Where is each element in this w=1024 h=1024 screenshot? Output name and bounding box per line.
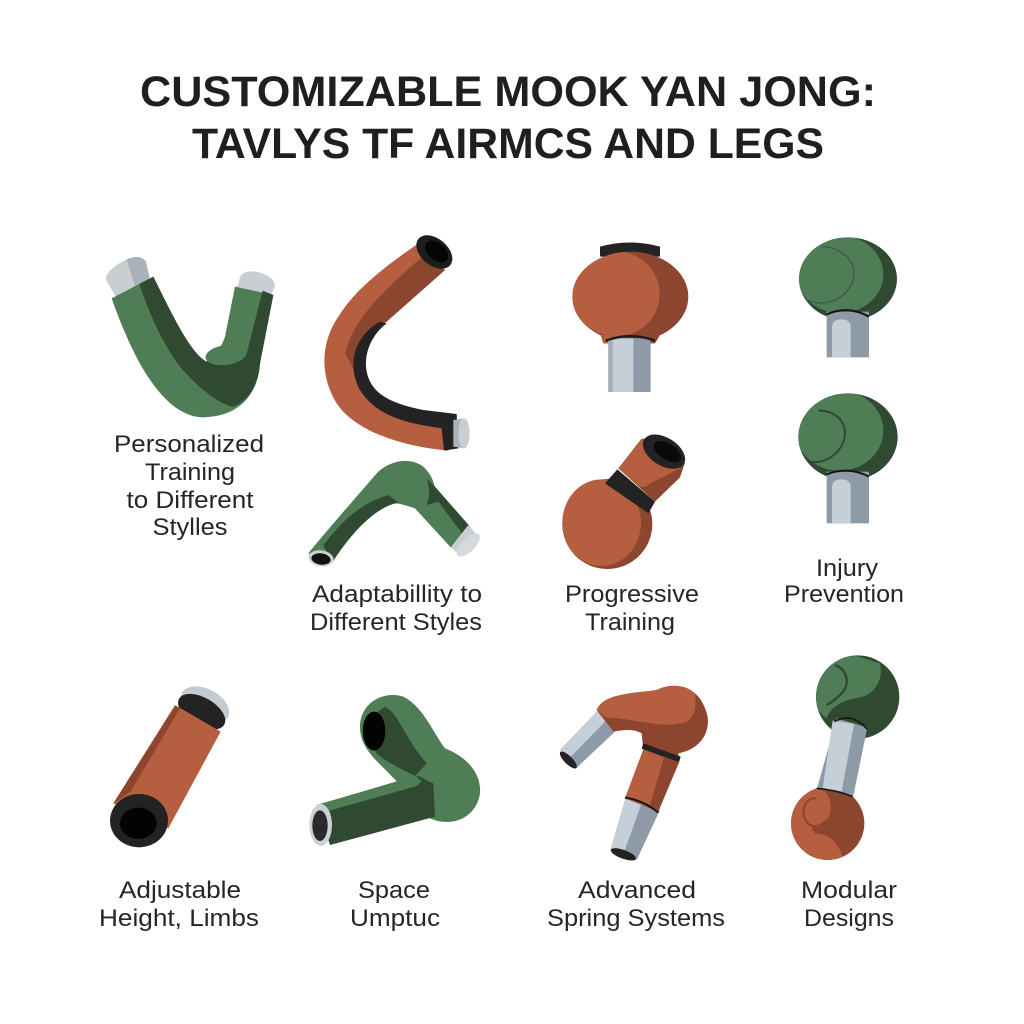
label: modular designs: Designs [804,905,894,932]
label: personalized training [114,431,264,541]
label: adaptability: Different Styles [310,609,482,636]
label: adjustable height [99,877,259,932]
title [140,68,876,168]
label: modular designs [801,877,897,932]
label: progressive training [565,581,699,636]
icon: terracotta ball with metal post [572,242,688,392]
label: adjustable height: Adjustable [119,877,241,904]
label: modular designs: Modular [801,877,897,904]
icon: green elbow arm [307,461,484,568]
label: space [350,877,440,932]
label: personalized training: Personalized [114,431,264,458]
label: adjustable height: Height, Limbs [99,905,259,932]
label: injury prevention: Injury [816,555,878,582]
icon: green ball with post, lower [795,391,898,523]
label: injury prevention [784,555,904,608]
label: progressive training: Training [585,609,675,636]
label: space: Umptuc [350,905,440,932]
label: progressive training: Progressive [565,581,699,608]
title: TAVLYS TF AIRMCS AND LEGS [192,120,824,168]
label: space: Space [358,877,430,904]
label: adaptability: Adaptabillity to [312,581,482,608]
icon: terracotta ball with angled sleeve [562,427,691,569]
icon: terracotta tube [110,679,235,847]
icon: terracotta hook with metal ends [557,686,708,863]
label: personalized training: Training [145,459,235,486]
label: advanced spring systems: Advanced [578,877,696,904]
title: CUSTOMIZABLE MOOK YAN JONG: [140,68,876,116]
label: personalized training: to Different [126,487,254,514]
icon: green V-shaped arm [106,257,275,417]
icon: terracotta curved arm [324,229,470,451]
label: personalized training: Stylles [152,514,228,541]
label: injury prevention: Prevention [784,581,904,608]
label: adaptability [310,581,482,636]
label: advanced spring systems [547,877,725,932]
icon: green ball with post, upper [797,236,897,357]
icon: green socket joint [309,695,480,846]
label: advanced spring systems: Spring Systems [547,905,725,932]
icon: modular design with two balls [788,655,899,863]
